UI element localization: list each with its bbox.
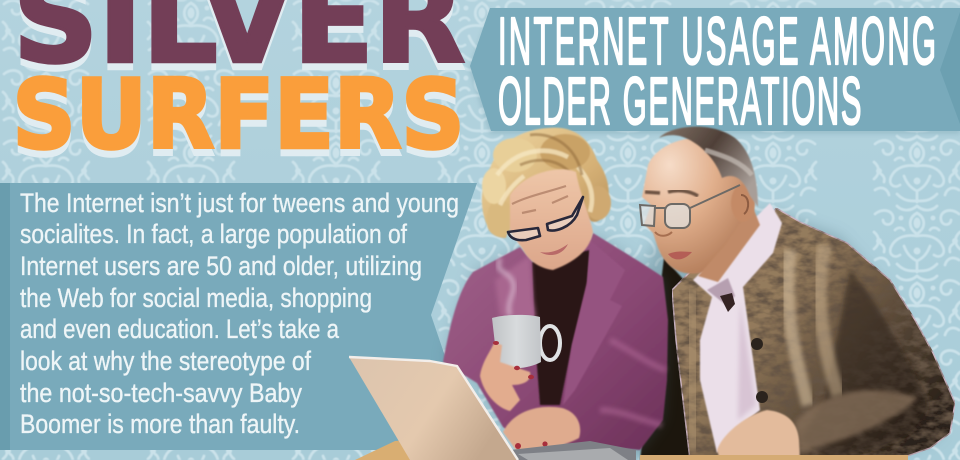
eyebrow and mouth	[645, 191, 698, 196]
subtitle text	[498, 5, 936, 139]
sleeve shadow	[800, 270, 927, 458]
shirt	[693, 203, 782, 453]
cardigan	[672, 208, 955, 460]
glasses	[508, 197, 583, 240]
intro text: and even education. Let’s take a	[20, 314, 340, 344]
ear	[731, 184, 755, 222]
coat	[443, 233, 668, 450]
mug	[492, 315, 560, 368]
intro text: the not-so-tech-savvy Baby	[20, 378, 302, 408]
glasses	[640, 185, 740, 228]
illustration: older man	[630, 127, 955, 460]
dark cardigan shadow side	[640, 258, 700, 460]
hair	[482, 128, 611, 238]
subtitle ribbon	[469, 5, 960, 139]
intro text: Boomer is more than faulty.	[20, 409, 300, 439]
laptop	[349, 357, 636, 460]
hair	[659, 127, 758, 207]
subtitle text: INTERNET USAGE AMONG	[498, 5, 936, 79]
steam	[499, 258, 514, 316]
coat lapels	[563, 240, 625, 405]
intro text: The Internet isn’t just for tweens and young	[20, 188, 459, 218]
intro text	[20, 188, 459, 439]
intro text: socialites. In fact, a large population of	[20, 219, 407, 249]
hand holding mug	[480, 343, 530, 411]
face	[510, 169, 593, 270]
intro text: look at why the stereotype of	[20, 346, 311, 376]
title: Silver Surfers: SURFERS	[12, 60, 464, 170]
buttons	[751, 338, 768, 403]
illustration: older woman	[443, 128, 668, 453]
man's hand	[717, 410, 800, 460]
turtleneck	[532, 250, 590, 405]
subtitle text: OLDER GENERATIONS	[498, 65, 861, 139]
intro panel	[0, 183, 477, 450]
typing hand	[503, 407, 580, 453]
intro text: the Web for social media, shopping	[20, 283, 372, 313]
title: Silver Surfers	[12, 0, 465, 170]
neck and head	[642, 138, 753, 274]
table	[355, 438, 908, 460]
intro text: Internet users are 50 and older, utilizing	[20, 251, 422, 281]
